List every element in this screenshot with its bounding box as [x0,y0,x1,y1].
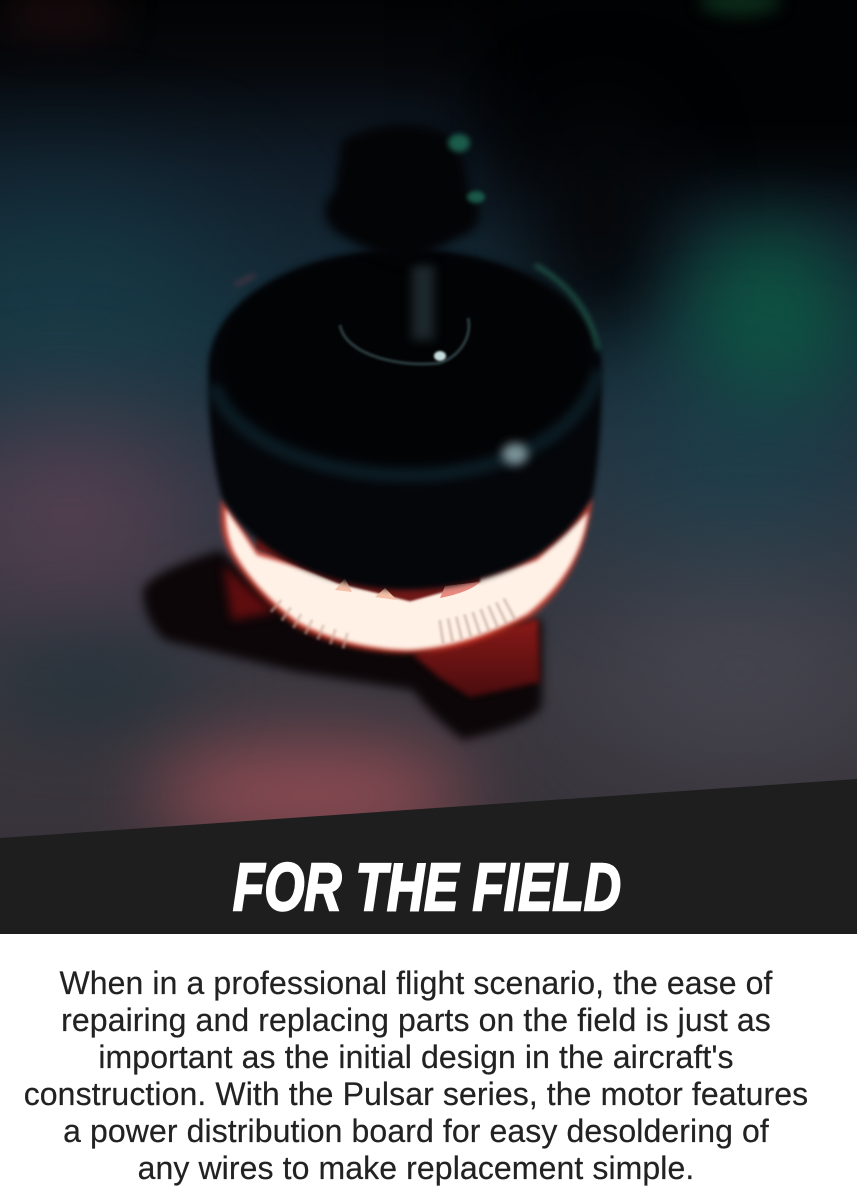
motor shaft and collar [340,265,469,364]
motor base mount [143,550,542,740]
prop nut [325,125,485,265]
body text: construction. With the Pulsar series, the motor features [24,1076,808,1112]
body text: a power distribution board for easy desoldering of [63,1113,769,1149]
title: FOR THE FIELD [233,850,621,925]
body text [24,965,808,1186]
body text: When in a professional flight scenario, the ease of [59,965,773,1001]
body text: any wires to make replacement simple. [138,1150,694,1186]
motor bell body [208,250,602,590]
background glows [0,0,857,845]
body text: important as the initial design in the aircraft's [98,1039,734,1075]
LED ring [221,497,592,653]
dark title band [0,779,857,934]
body text: repairing and replacing parts on the field is just as [61,1002,771,1038]
